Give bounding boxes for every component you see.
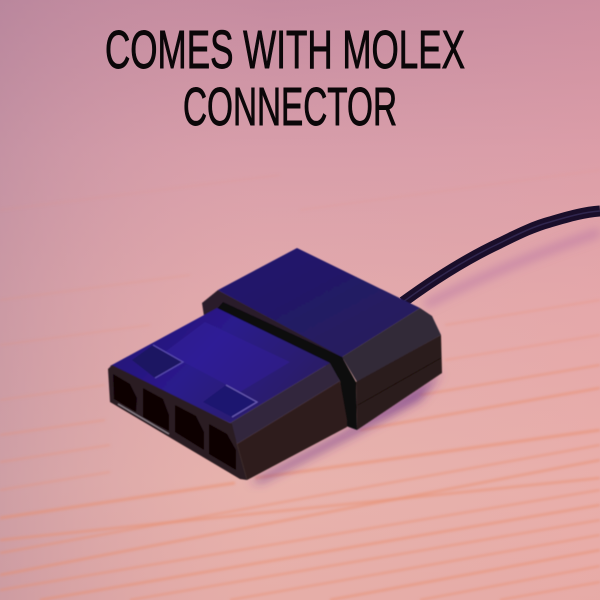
wood grain stripes bbox=[0, 170, 600, 600]
rear housing flange bbox=[202, 290, 345, 368]
rear housing chamfer bbox=[342, 308, 441, 382]
plug chamfer bbox=[230, 363, 340, 444]
cable bbox=[403, 211, 600, 302]
latch window right bbox=[203, 385, 257, 417]
plug top bbox=[110, 308, 330, 423]
title: CONNECTOR bbox=[183, 77, 397, 137]
plug front face bbox=[108, 365, 247, 480]
latch window left bbox=[132, 345, 183, 378]
black collar groove bbox=[217, 302, 357, 430]
molex connector bbox=[108, 248, 442, 480]
cable shadow bbox=[425, 232, 600, 305]
socket holes bbox=[113, 374, 236, 470]
rear housing top bbox=[218, 248, 420, 357]
socket lower lip highlight bbox=[118, 404, 169, 434]
plug side bbox=[237, 381, 347, 480]
connector shadow bbox=[250, 372, 442, 482]
title bbox=[105, 20, 465, 137]
rear housing side bbox=[356, 335, 442, 430]
